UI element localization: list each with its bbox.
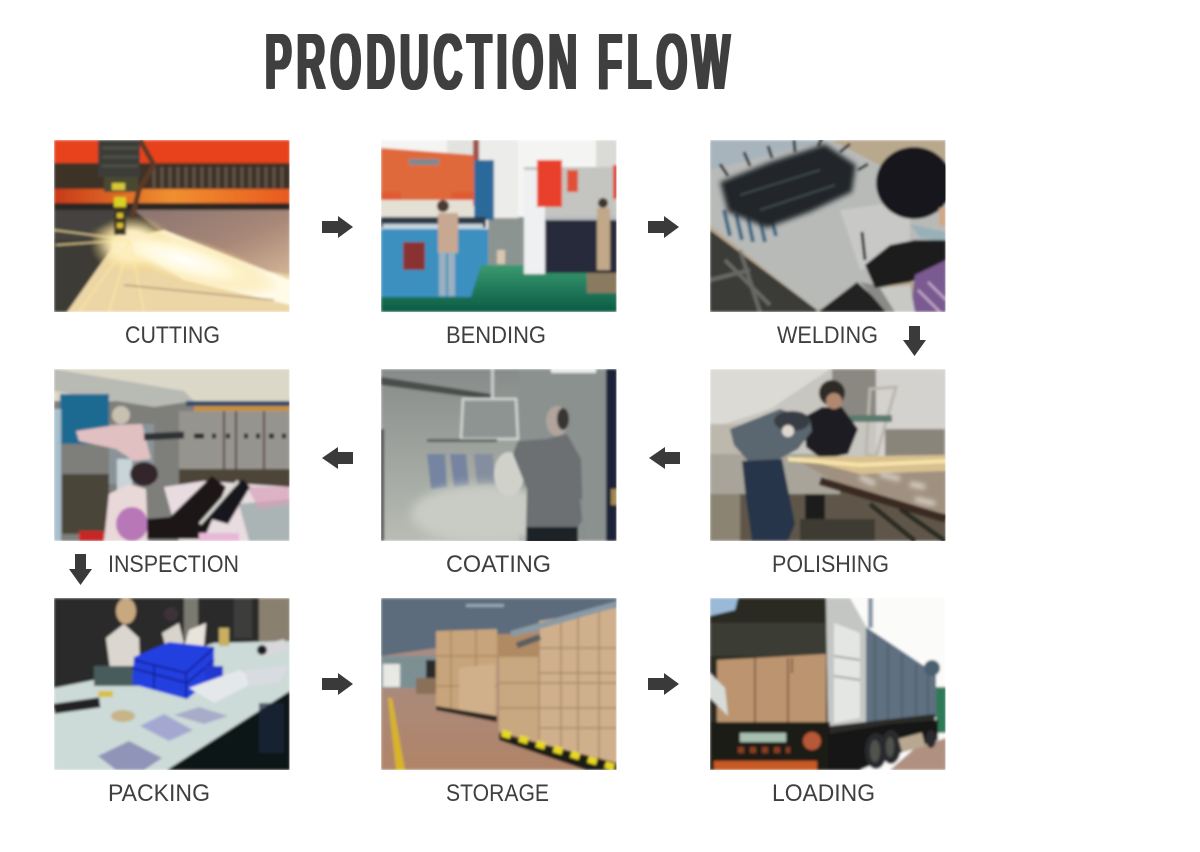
arrow: inspection to packing (down) [69, 554, 92, 585]
photo: cutting [54, 140, 290, 312]
label: loading: LOADING [772, 780, 875, 807]
photo: bending [381, 140, 617, 312]
arrow: storage to loading [648, 673, 679, 695]
arrow: cutting to bending [322, 216, 353, 238]
label: bending: BENDING [446, 322, 546, 349]
arrow: bending to welding [648, 216, 679, 238]
label: inspection: INSPECTION [108, 551, 239, 578]
photo: storage [381, 598, 617, 770]
arrow: welding to polishing (down) [903, 326, 926, 356]
photo: loading [710, 598, 946, 770]
label: coating: COATING [446, 551, 551, 578]
label: packing: PACKING [108, 780, 210, 807]
photo: welding [710, 138, 952, 312]
arrow: packing to storage [322, 673, 353, 695]
photo: inspection [54, 369, 290, 541]
infographic: production flow [54, 140, 946, 801]
arrow: coating to inspection [322, 447, 353, 469]
label: welding: WELDING [777, 322, 878, 349]
label: polishing: POLISHING [772, 551, 889, 578]
arrow: polishing to coating [649, 447, 680, 469]
photo: packing [53, 598, 290, 770]
label: storage: STORAGE [446, 780, 549, 807]
photo: polishing [710, 369, 946, 541]
title: PRODUCTION FLOW [265, 17, 735, 106]
label: cutting: CUTTING [125, 322, 220, 349]
photo: coating [381, 369, 617, 544]
